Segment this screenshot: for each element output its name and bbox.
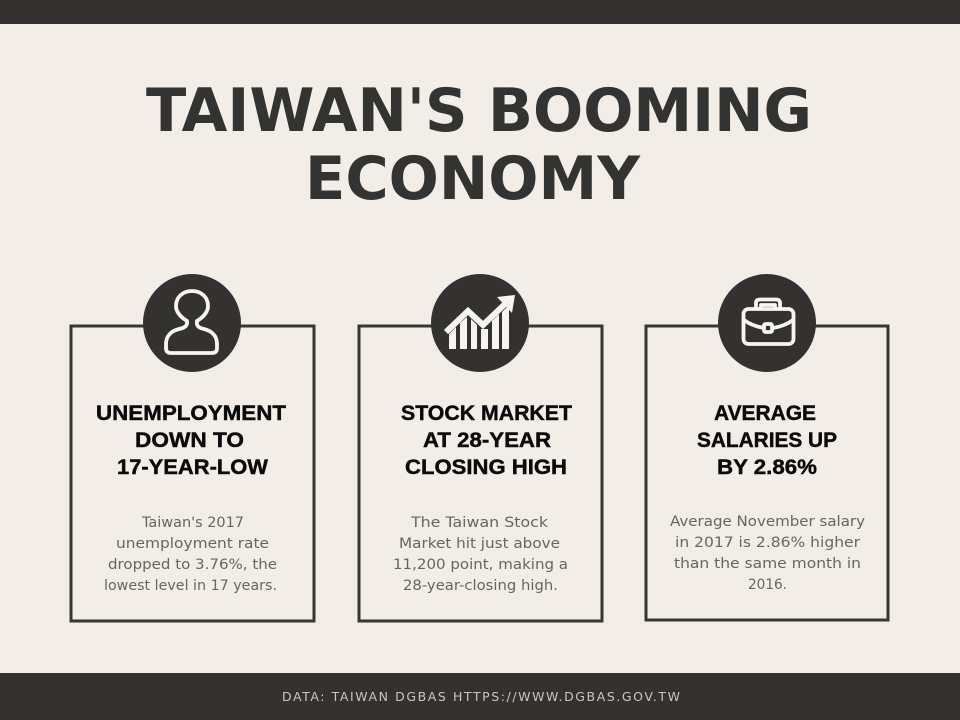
text: stock market detail: 11,200 point, making a [393,557,568,573]
text: unemployment detail: unemployment rate [116,536,269,552]
text: unemployment detail: dropped to 3.76%, the [108,557,277,573]
top bar [0,0,960,24]
heading: salaries: SALARIES UP [697,428,837,452]
heading: unemployment: DOWN TO [135,428,244,452]
panel: unemployment [71,274,314,621]
panel frame: stock market [359,326,602,621]
icon: person [143,274,241,372]
text: stock market detail: The Taiwan Stock [410,515,549,531]
heading: stock market: AT 28-YEAR [423,428,551,452]
source credit: DATA: TAIWAN DGBAS HTTPS://WWW.DGBAS.GOV.TW [282,689,680,704]
panel frame: unemployment [71,326,314,621]
text: unemployment detail: Taiwan's 2017 [141,515,244,531]
title [146,76,812,214]
text: salaries detail: than the same month in [674,556,861,572]
text: salaries detail: 2016. [748,577,787,593]
text: salaries detail: Average November salary [670,514,865,530]
heading: salaries: AVERAGE [714,401,816,425]
icon: briefcase [718,274,816,372]
heading: stock market: CLOSING HIGH [405,455,567,479]
heading: stock market [401,401,572,479]
text: stock market detail [393,515,568,594]
heading: stock market: STOCK MARKET [401,401,572,425]
heading: salaries [697,401,837,479]
text: salaries detail [670,514,865,593]
text: stock market detail: 28-year-closing high. [403,578,558,594]
panel: salaries [646,274,888,620]
title: TAIWAN'S BOOMING [146,76,812,146]
bottom bar [0,673,960,720]
text: unemployment detail: lowest level in 17 years. [104,578,277,594]
heading: salaries: BY 2.86% [717,455,817,479]
icon: rising chart [431,274,529,372]
text: salaries detail: in 2017 is 2.86% higher [675,535,860,551]
heading: unemployment: 17-YEAR-LOW [117,455,269,479]
heading: unemployment [96,401,286,479]
title: ECONOMY [305,144,642,214]
text: unemployment detail [104,515,277,594]
heading: unemployment: UNEMPLOYMENT [96,401,286,425]
text: stock market detail: Market hit just above [399,536,560,552]
panel frame: salaries [646,326,888,620]
panel: stock market [359,274,602,621]
